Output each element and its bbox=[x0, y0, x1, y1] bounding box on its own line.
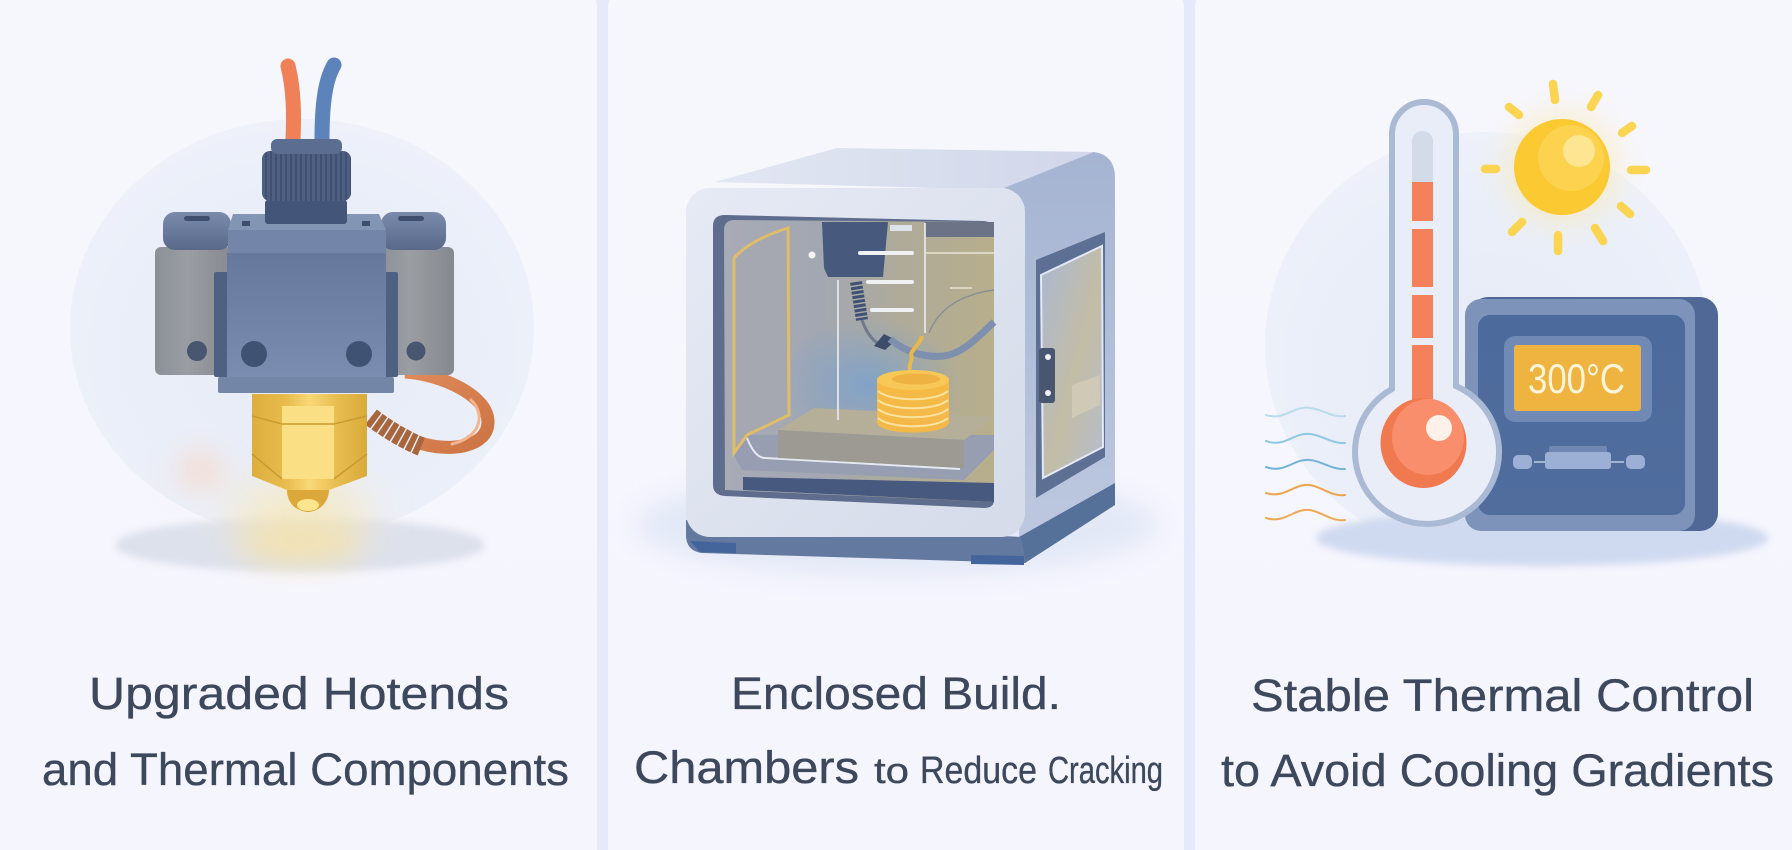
caption: stable thermal control: to Avoid Cooling Gradients bbox=[1221, 745, 1774, 796]
chamber interior bbox=[713, 215, 994, 508]
display reading: 300°C bbox=[1528, 355, 1625, 402]
caption: upgraded hotends: Upgraded Hotends bbox=[89, 668, 509, 719]
molten filament bbox=[910, 336, 922, 375]
icon: enclosed 3D printer bbox=[635, 148, 1159, 575]
caption: enclosed build chambers: Enclosed Build. bbox=[731, 668, 1061, 719]
printer body shell bbox=[686, 148, 1115, 565]
panel: stable thermal control bbox=[1195, 0, 1792, 850]
airflow waves bbox=[1266, 408, 1345, 520]
icon: thermometer, sun and temperature controller bbox=[1265, 84, 1768, 566]
controller buttons bbox=[1513, 446, 1645, 469]
caption: upgraded hotends bbox=[42, 668, 569, 795]
caption: enclosed build chambers: Chambers bbox=[634, 742, 859, 793]
caption: enclosed build chambers: to bbox=[874, 750, 909, 791]
caption: upgraded hotends: and Thermal Components bbox=[42, 744, 569, 795]
panel: enclosed build chambers bbox=[608, 0, 1184, 850]
temperature controller bbox=[1465, 297, 1718, 531]
icon: hotend assembly bbox=[70, 65, 534, 572]
caption: enclosed build chambers: Reduce bbox=[920, 750, 1037, 792]
caption: stable thermal control bbox=[1221, 670, 1774, 796]
brass heater block and nozzle bbox=[252, 394, 367, 512]
caption: enclosed build chambers bbox=[634, 668, 1163, 793]
printed stack bbox=[877, 370, 949, 432]
print head and cable bbox=[822, 222, 994, 356]
knurled fitting bbox=[262, 139, 351, 224]
wires: orange and blue bbox=[288, 65, 334, 140]
copper heater wire bbox=[371, 372, 488, 447]
side door window and hinge bbox=[1036, 232, 1105, 498]
caption: stable thermal control: Stable Thermal Control bbox=[1251, 670, 1754, 721]
thermometer bbox=[1355, 102, 1499, 524]
panel: upgraded hotends bbox=[0, 0, 597, 850]
caption: enclosed build chambers: Cracking bbox=[1048, 750, 1163, 792]
clamp blocks bbox=[155, 212, 454, 377]
sun bbox=[1485, 84, 1646, 251]
main carriage block bbox=[218, 214, 394, 393]
